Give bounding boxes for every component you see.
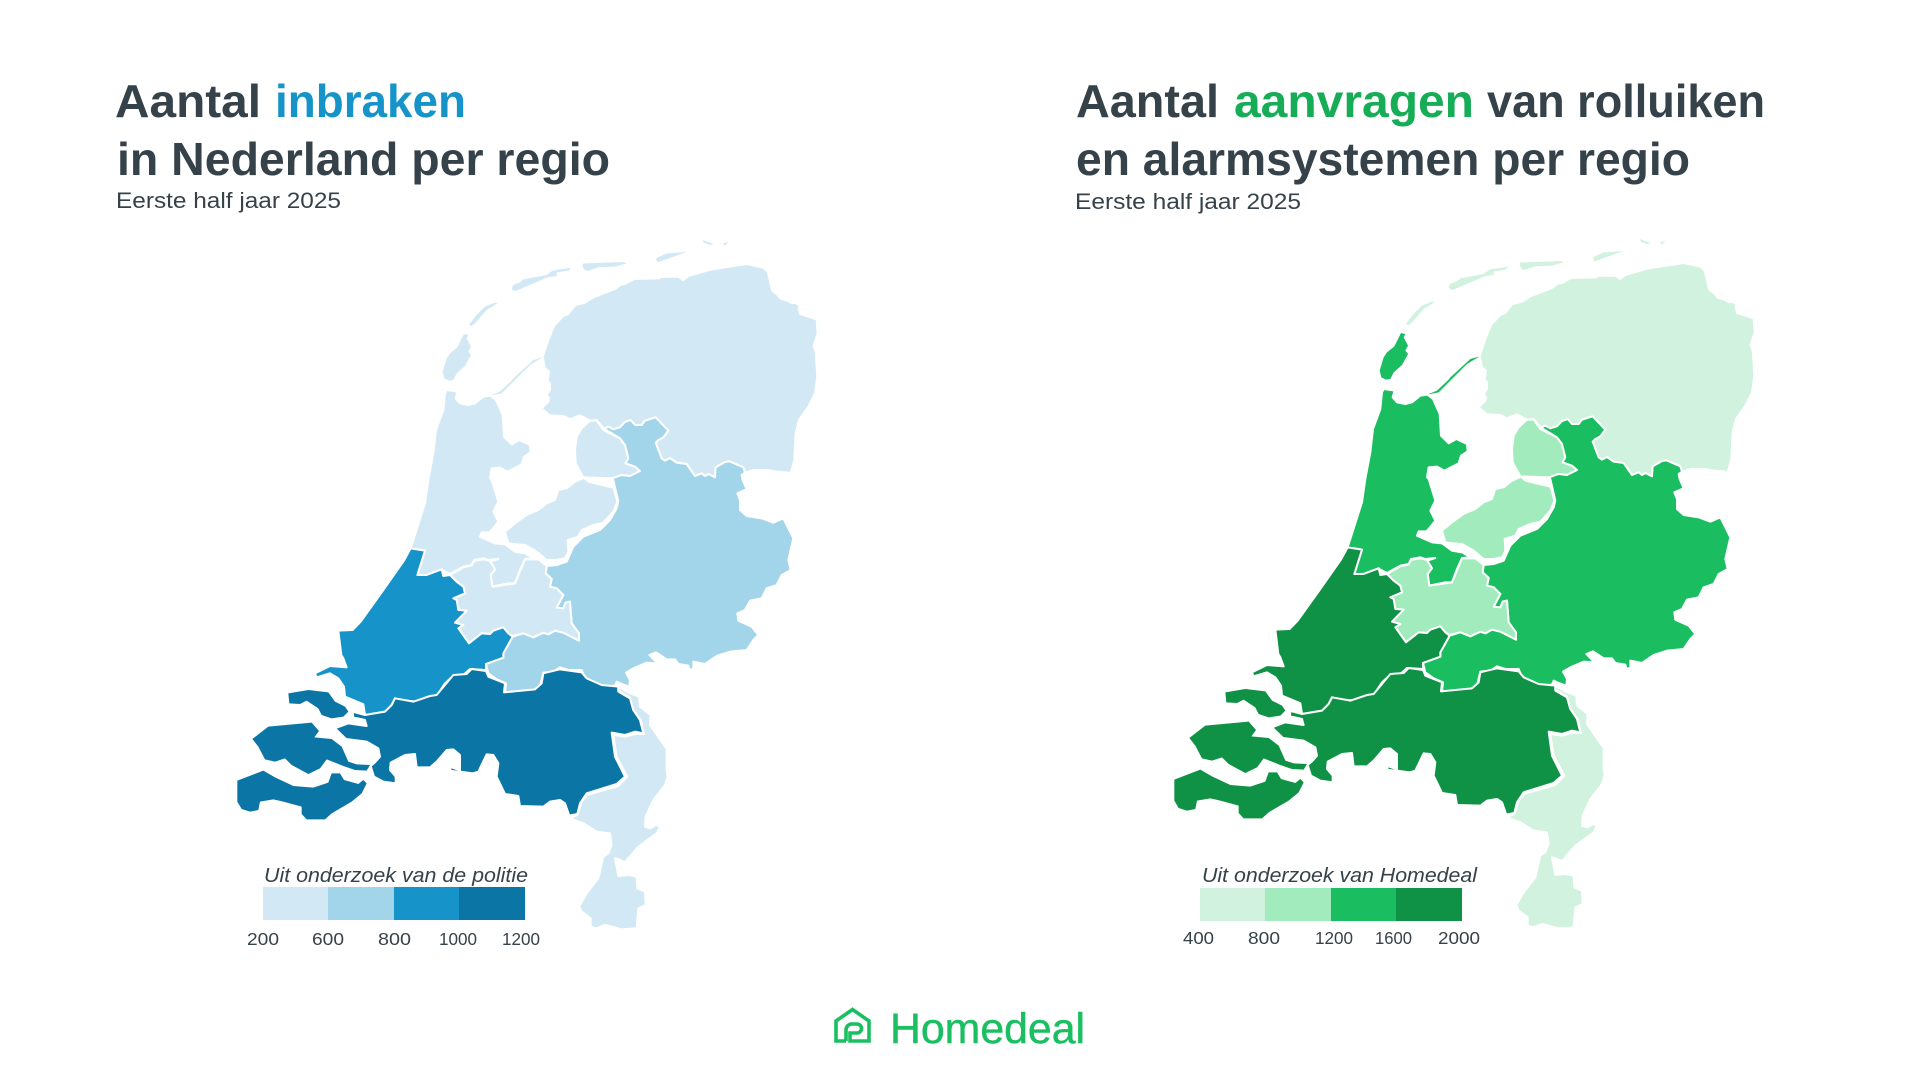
legend: politie — [247, 865, 540, 949]
region: flevoland — [1442, 477, 1554, 559]
regions — [1252, 263, 1755, 928]
legend colour bar — [1200, 888, 1462, 921]
legend scale labels: 2000 — [1438, 928, 1480, 948]
Wadden islands — [443, 240, 728, 396]
legend title: Uit onderzoek van de politie — [264, 865, 528, 887]
legend scale labels: 1600 — [1375, 928, 1412, 948]
region: noord — [542, 264, 818, 477]
region: limburg — [570, 687, 668, 929]
region: noord-brabant — [335, 669, 643, 816]
left heading: Aantal — [115, 75, 261, 127]
region: utrecht — [450, 559, 579, 643]
legend scale labels: 200 — [247, 929, 279, 949]
region: utrecht — [1387, 558, 1516, 642]
legend scale labels: 1200 — [502, 929, 540, 949]
legend: Homedeal — [1183, 865, 1480, 948]
region: oost — [1423, 416, 1730, 692]
legend scale labels: 800 — [1248, 928, 1280, 948]
legend scale labels — [247, 929, 540, 949]
Zeeland islands — [1174, 689, 1395, 818]
right heading: van rolluiken — [1487, 75, 1765, 127]
logo: Homedeal — [836, 1005, 1085, 1053]
right heading: en alarmsystemen per regio — [1076, 133, 1690, 185]
legend scale labels: 1200 — [1315, 928, 1353, 948]
map: inbraken per regio — [237, 240, 818, 929]
legend title: Uit onderzoek van Homedeal — [1202, 865, 1478, 887]
left heading — [115, 75, 610, 185]
right subtitle: Eerste half jaar 2025 — [1075, 189, 1301, 214]
region: zuid-holland — [315, 548, 513, 715]
region: oost — [486, 417, 793, 693]
right heading — [1076, 75, 1765, 185]
legend scale labels: 800 — [378, 929, 411, 949]
region: limburg — [1507, 686, 1605, 928]
map: aanvragen per regio — [1174, 239, 1755, 928]
legend scale labels: 400 — [1183, 928, 1214, 948]
left heading: inbraken — [275, 75, 466, 127]
legend scale labels — [1183, 928, 1480, 948]
Texel and Afsluitdijk — [1380, 333, 1480, 395]
region: noord — [1479, 263, 1755, 476]
legend scale labels: 600 — [312, 929, 344, 949]
left heading: in Nederland per regio — [117, 133, 610, 185]
region: noord-holland — [411, 390, 533, 587]
icon: house — [836, 1010, 869, 1041]
region: noordoostpolder — [1512, 420, 1577, 477]
Wadden islands — [1406, 239, 1665, 325]
region: flevoland — [505, 478, 617, 560]
region: noord-holland — [1348, 389, 1470, 586]
legend colour bar — [263, 887, 525, 920]
wordmark: Homedeal — [890, 1005, 1085, 1053]
regions — [315, 264, 818, 929]
right heading: Aantal — [1076, 75, 1219, 127]
right heading: aanvragen — [1234, 75, 1474, 127]
Zeeland islands — [237, 690, 458, 819]
left subtitle: Eerste half jaar 2025 — [116, 188, 341, 213]
legend scale labels: 1000 — [439, 929, 477, 949]
region: noord-brabant — [1272, 668, 1580, 815]
region: zuid-holland — [1252, 547, 1450, 714]
region: noordoostpolder — [575, 421, 640, 478]
